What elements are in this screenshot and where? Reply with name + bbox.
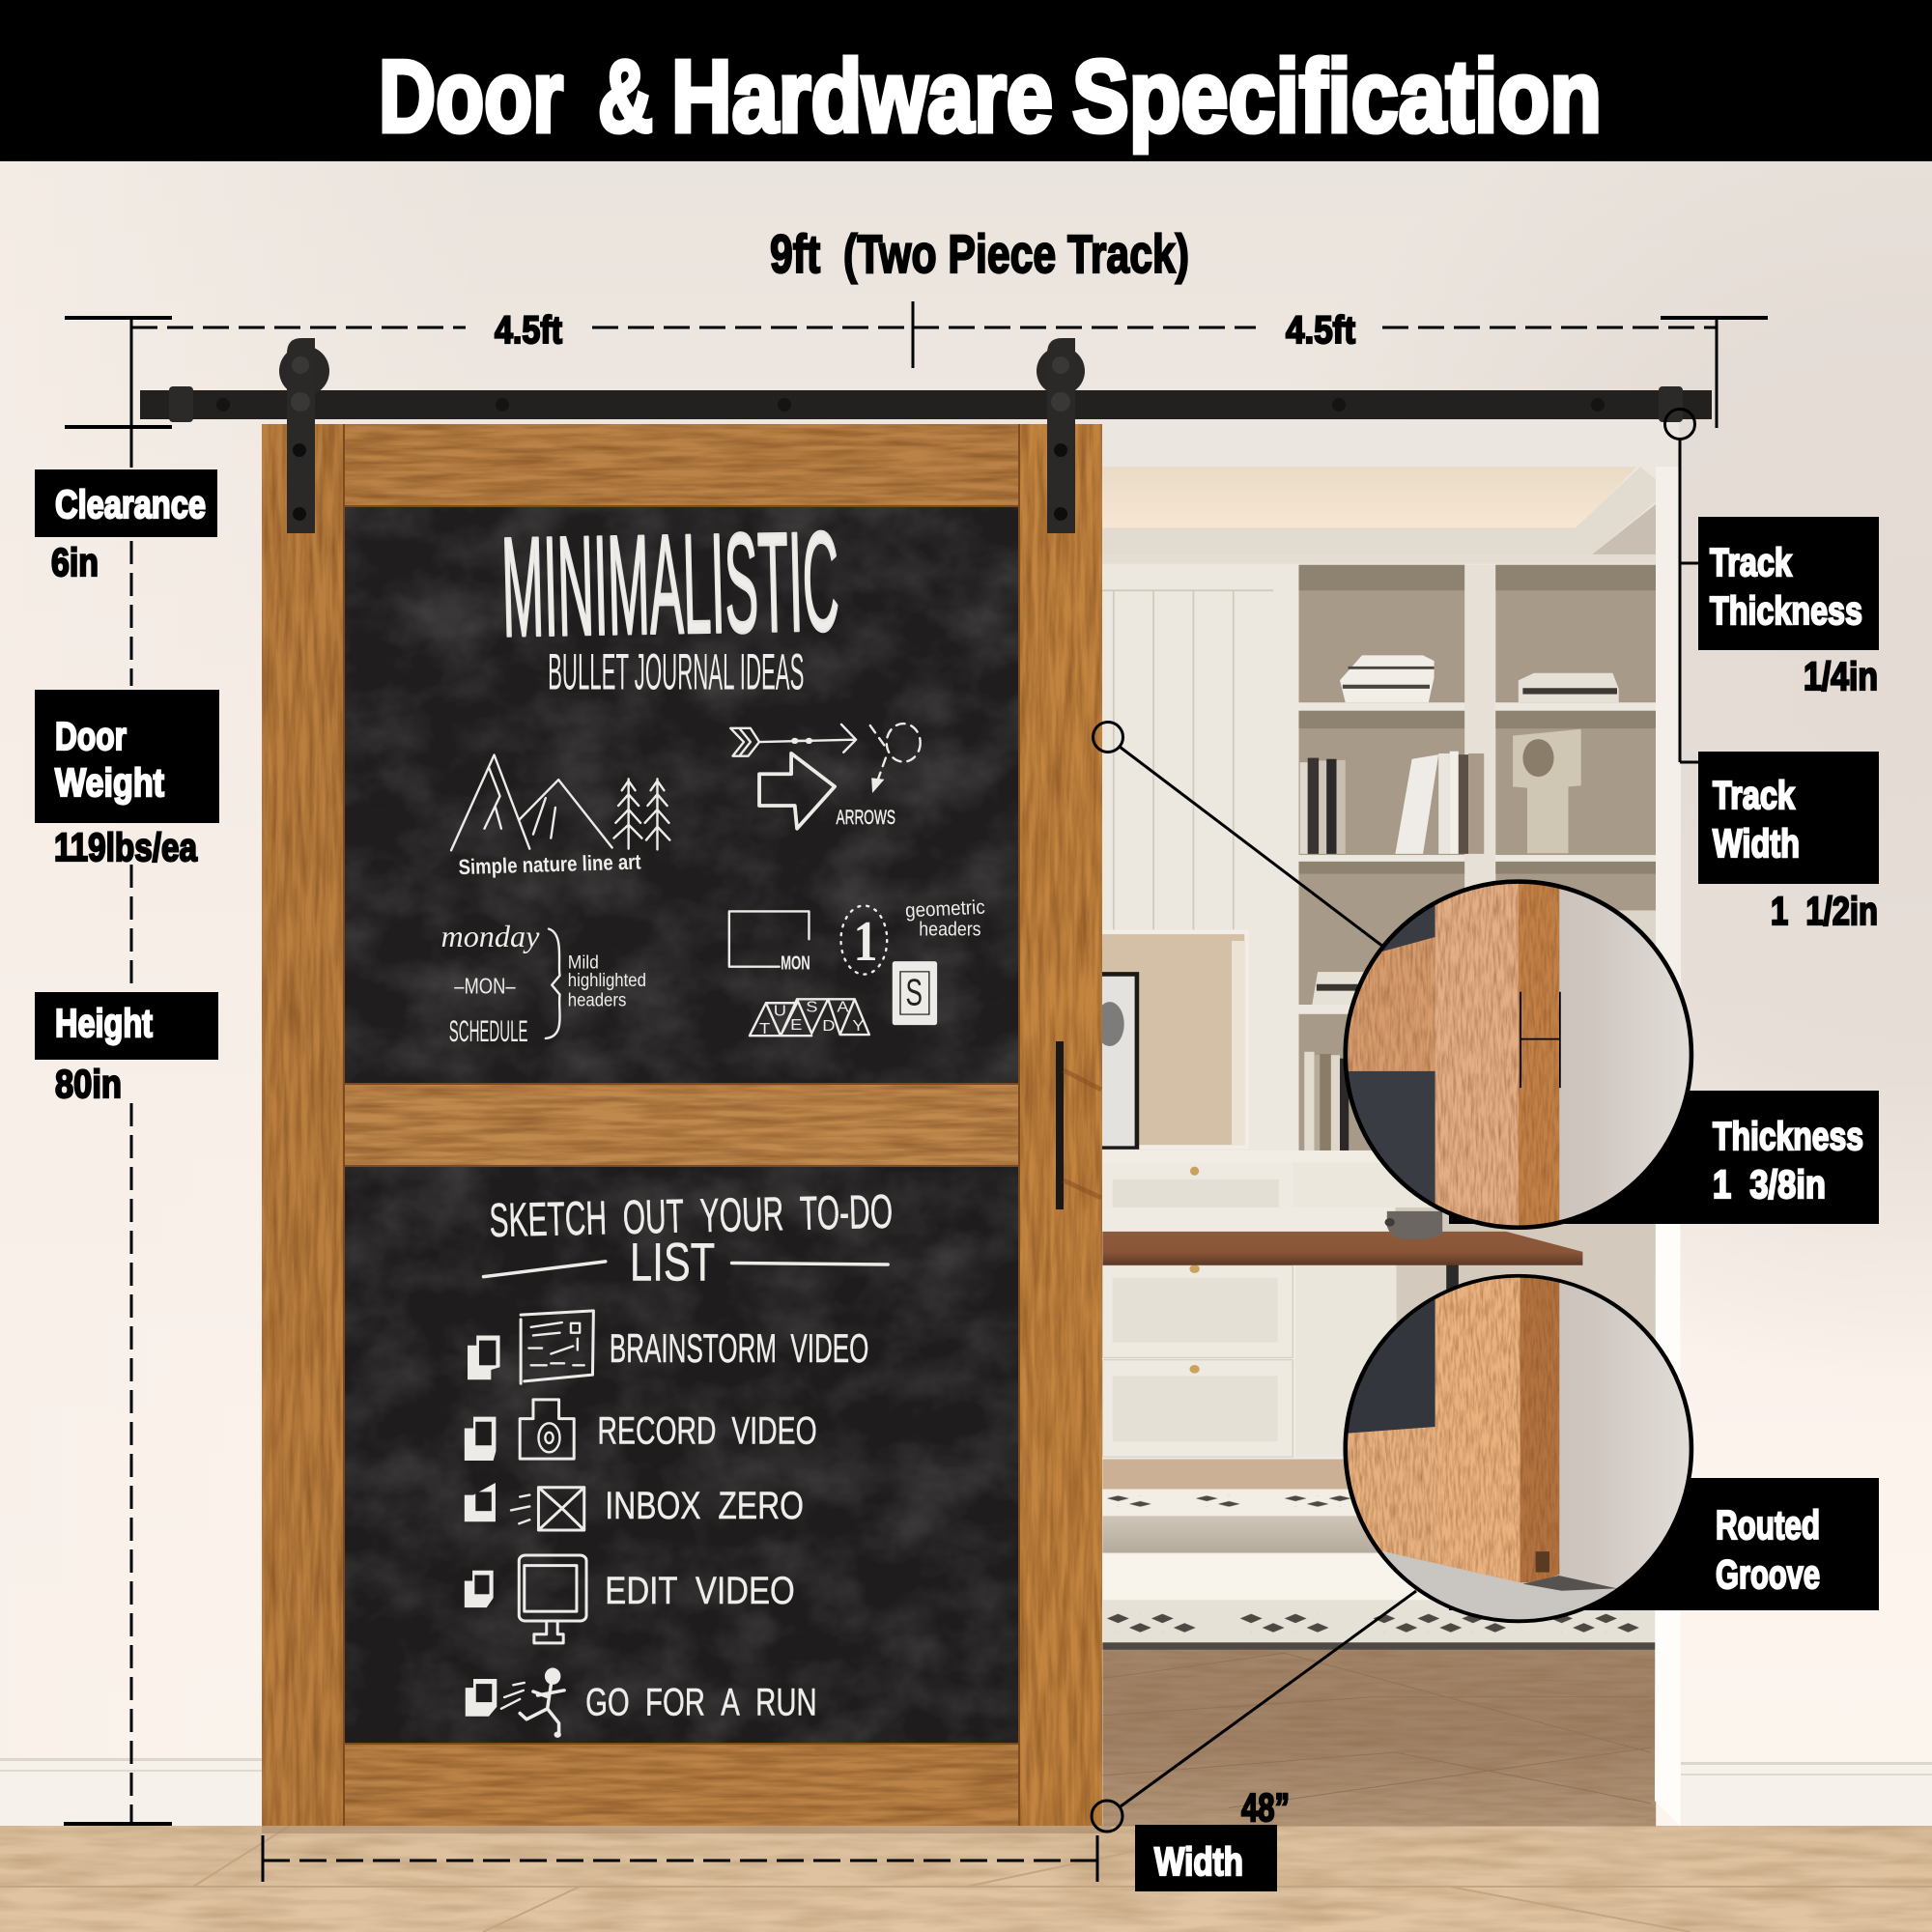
upper chalk drawing: BULLET JOURNAL IDEAS bbox=[548, 644, 804, 701]
room seen through doorway: lower part bbox=[1102, 1041, 1680, 1827]
rug bbox=[1102, 1490, 1656, 1650]
track width label: Track bbox=[1713, 773, 1795, 817]
lower chalkboard bbox=[344, 1166, 1019, 1744]
middle rail bbox=[344, 1084, 1019, 1166]
width label bbox=[1135, 1785, 1290, 1891]
chalk geometric headers: Y bbox=[852, 1017, 865, 1035]
infographic canvas: MINIMALISTIC bbox=[500, 502, 840, 667]
chalk mountains and trees: Simple nature line art bbox=[458, 850, 641, 880]
checkbox row: edit video: EDIT VIDEO bbox=[605, 1570, 795, 1612]
track width label: Width bbox=[1713, 821, 1800, 866]
thickness label: 1 3/8in bbox=[1713, 1162, 1826, 1207]
width label: Width bbox=[1154, 1839, 1243, 1884]
chalk geometric headers: headers bbox=[919, 918, 981, 940]
checkbox row: inbox zero: INBOX ZERO bbox=[605, 1485, 804, 1527]
frame joint lines bbox=[344, 424, 1019, 1826]
lower chalk drawing bbox=[465, 1185, 894, 1738]
drawers bbox=[1102, 1208, 1459, 1460]
title bbox=[379, 40, 1602, 154]
height label bbox=[35, 992, 218, 1106]
track thickness label: 1/4in bbox=[1804, 654, 1878, 698]
height label: Height bbox=[55, 1001, 153, 1045]
checkbox row: go for a run: GO FOR A RUN bbox=[585, 1681, 817, 1724]
track width label bbox=[1698, 752, 1879, 933]
clearance and height dimension line bbox=[64, 318, 172, 1824]
width dimension line bbox=[263, 1835, 1097, 1882]
clearance label: Clearance bbox=[55, 482, 206, 526]
checkbox row: record video bbox=[465, 1400, 817, 1461]
track bolts bbox=[216, 398, 1605, 412]
framed art bbox=[1095, 930, 1249, 1150]
chalk heading list bbox=[484, 1233, 888, 1293]
door handle bbox=[1056, 1041, 1101, 1209]
chalk headers list: Mild bbox=[568, 952, 599, 973]
door weight label: Weight bbox=[55, 760, 164, 805]
chalk headers list: highlighted bbox=[568, 970, 646, 990]
chalk geometric headers: A bbox=[837, 998, 849, 1015]
track length dimension line bbox=[131, 301, 1768, 428]
chalk heading: SKETCH OUT YOUR TO-DO bbox=[489, 1185, 894, 1247]
chalk headers list bbox=[440, 921, 646, 1049]
left section length: 4.5ft bbox=[495, 309, 562, 352]
title: & bbox=[598, 40, 653, 154]
thickness zoom lens bbox=[1340, 874, 1700, 1235]
chalk geometric headers: U bbox=[774, 1002, 786, 1019]
chalk geometric headers bbox=[729, 895, 985, 1037]
lintel bbox=[1063, 419, 1679, 467]
bookcase bbox=[1273, 564, 1657, 1163]
barn door track bbox=[140, 386, 1712, 422]
sliding door bbox=[262, 424, 1102, 1826]
chalk geometric headers: MON bbox=[781, 952, 810, 974]
thickness dimension marks bbox=[1520, 992, 1560, 1088]
chalk headers list: headers bbox=[568, 990, 626, 1010]
chalk geometric headers: S bbox=[806, 998, 817, 1015]
left stile bbox=[262, 424, 344, 1826]
chalk headers list: –MON– bbox=[454, 975, 516, 999]
chalk heading list: LIST bbox=[630, 1233, 715, 1293]
crown moulding bbox=[1063, 467, 1656, 554]
track thickness label: Thickness bbox=[1710, 588, 1862, 633]
black connector tail for groove label bbox=[1449, 1478, 1879, 1610]
panelled wall bbox=[1063, 504, 1656, 1151]
chalk headers list: monday bbox=[440, 921, 540, 954]
upper chalk drawing bbox=[440, 502, 985, 1049]
track length label: 9ft (Two Piece Track) bbox=[770, 223, 1189, 284]
room seen through doorway: upper part bbox=[1063, 419, 1679, 1251]
floor band bbox=[1102, 1460, 1656, 1490]
track callout connector bbox=[1665, 410, 1698, 762]
track thickness label bbox=[1698, 517, 1879, 698]
title: Door bbox=[379, 40, 563, 154]
mug bbox=[1384, 1211, 1442, 1239]
header bar bbox=[0, 0, 1932, 161]
track thickness label: Track bbox=[1710, 540, 1792, 584]
routed groove label: Routed bbox=[1716, 1502, 1820, 1548]
title: Specification bbox=[1072, 40, 1602, 154]
counter top and cabinets bbox=[1101, 1151, 1656, 1240]
right track stop bbox=[1659, 386, 1683, 422]
left roller hanger bbox=[279, 338, 329, 533]
checkbox row: edit video bbox=[465, 1555, 795, 1643]
checkbox row: brainstorm video bbox=[468, 1311, 868, 1383]
checkbox row: inbox zero bbox=[465, 1483, 804, 1530]
door jamb upper bbox=[1656, 467, 1681, 1143]
door weight label: 119lbs/ea bbox=[54, 825, 198, 869]
right roller hanger bbox=[1037, 338, 1085, 533]
thickness connector bbox=[1094, 723, 1383, 947]
thickness label bbox=[1713, 1114, 1863, 1207]
checkbox row: go for a run bbox=[466, 1668, 817, 1738]
left track stop bbox=[169, 386, 193, 422]
height label: 80in bbox=[55, 1062, 122, 1106]
chalk geometric headers: S bbox=[906, 972, 923, 1013]
bottom rail bbox=[344, 1744, 1019, 1826]
door jamb bbox=[1655, 1041, 1680, 1827]
title: Hardware bbox=[671, 40, 1053, 154]
clearance label: 6in bbox=[51, 540, 99, 584]
chalk mountains and trees bbox=[451, 754, 669, 880]
chalk geometric headers: T bbox=[759, 1020, 771, 1037]
books and ornaments bbox=[1300, 655, 1656, 1151]
right section length: 4.5ft bbox=[1286, 309, 1355, 352]
top rail bbox=[344, 424, 1019, 506]
chalk geometric headers: 1 bbox=[853, 909, 878, 973]
chalk headers list: SCHEDULE bbox=[449, 1014, 527, 1049]
chalk geometric headers: E bbox=[790, 1016, 802, 1034]
chalk arrows: ARROWS bbox=[836, 806, 895, 829]
upper chalkboard bbox=[344, 506, 1019, 1084]
routed groove label: Groove bbox=[1716, 1551, 1820, 1597]
desk top bbox=[1102, 1232, 1582, 1265]
herringbone room floor bbox=[1102, 1650, 1656, 1827]
ceiling cove light bbox=[1063, 467, 1636, 527]
door weight label: Door bbox=[55, 714, 127, 758]
chalk geometric headers: D bbox=[822, 1017, 835, 1035]
width label: 48” bbox=[1241, 1785, 1290, 1830]
track width label: 1 1/2in bbox=[1771, 889, 1878, 933]
black connector tail for thickness label bbox=[1449, 1091, 1879, 1224]
door weight label bbox=[35, 690, 219, 869]
checkbox row: record video: RECORD VIDEO bbox=[598, 1409, 817, 1452]
chalk arrows bbox=[730, 724, 921, 829]
checkbox row: brainstorm video: BRAINSTORM VIDEO bbox=[610, 1325, 868, 1371]
wood floor bbox=[0, 1826, 1932, 1932]
clearance label bbox=[35, 469, 217, 584]
right stile bbox=[1019, 424, 1102, 1826]
routed groove label bbox=[1716, 1502, 1820, 1597]
width connector bbox=[1092, 1591, 1416, 1832]
back wall behind desk bbox=[1395, 1208, 1656, 1490]
routed groove zoom lens bbox=[1340, 1272, 1700, 1628]
thickness label: Thickness bbox=[1713, 1114, 1863, 1158]
baseboards bbox=[0, 1758, 1932, 1826]
chalk geometric headers: geometric bbox=[904, 895, 985, 922]
